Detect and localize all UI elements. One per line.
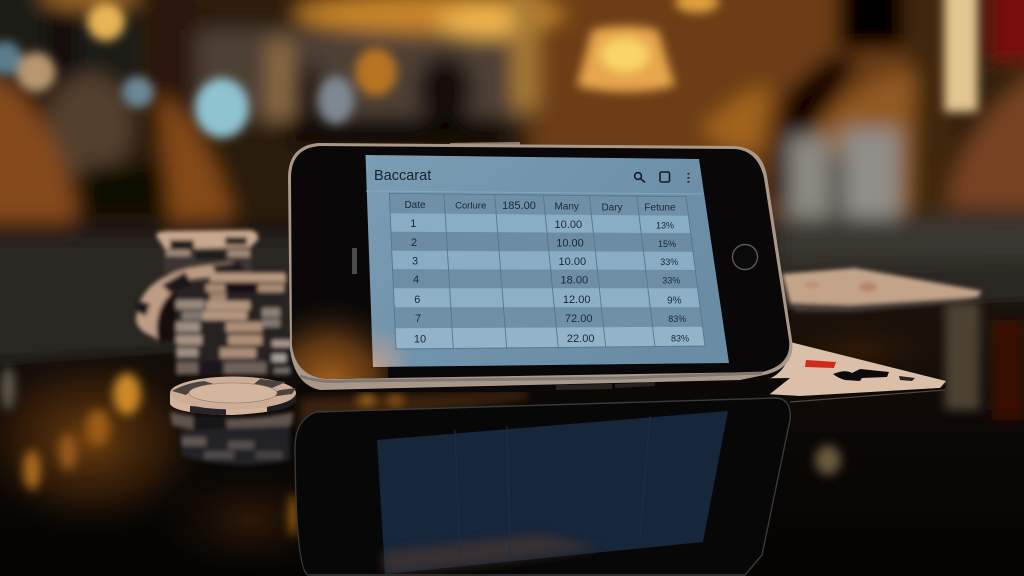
table text: 83% [668, 314, 686, 324]
bottom silver edge [300, 373, 762, 381]
phone [288, 142, 792, 392]
table text: 10.00 [559, 256, 586, 268]
home button [732, 244, 758, 270]
table text: 9% [667, 296, 682, 306]
top chip stack [164, 236, 252, 272]
table text: 1 [410, 218, 416, 230]
table text: Date [404, 200, 426, 211]
table text: 10.00 [555, 219, 582, 231]
table text: Fetune [644, 202, 676, 214]
table text: Dary [601, 202, 623, 214]
far table band [0, 210, 1024, 372]
table text: 10.00 [556, 238, 584, 250]
white cups [788, 136, 832, 218]
table text: 185.00 [502, 200, 536, 212]
table text: 6 [414, 294, 420, 306]
blurred playing card (back) [782, 268, 982, 312]
phone silver frame [288, 143, 792, 390]
phone reflection on the table [295, 378, 790, 575]
chairs [0, 50, 76, 232]
leaning chip [136, 262, 245, 340]
tall chip stack [176, 271, 288, 375]
black glossy table surface [0, 302, 1024, 576]
table text: Corlure [455, 200, 486, 212]
blurred restaurant background [0, 0, 1024, 372]
table text: 18.00 [561, 274, 588, 286]
table text: 7 [415, 313, 421, 325]
table text: 15% [658, 239, 676, 249]
warm glow on bezel [292, 308, 388, 379]
table text: 10 [414, 334, 426, 346]
toolbar icons [635, 172, 688, 182]
table text: 12.00 [563, 294, 590, 306]
table text [404, 200, 689, 346]
seated figures [46, 10, 78, 88]
table text: 33% [660, 257, 678, 267]
chip reflection [170, 412, 294, 465]
phone underside [296, 352, 790, 392]
card red pip [805, 360, 836, 368]
playing card (front) [765, 342, 946, 404]
table text: 22.00 [567, 333, 594, 345]
speaker [352, 248, 357, 274]
table text: 2 [411, 237, 417, 249]
data table [389, 193, 705, 349]
table text: Many [554, 202, 579, 212]
table text: 13% [656, 220, 674, 230]
table text: 3 [412, 256, 418, 268]
table text: 72.00 [565, 313, 592, 325]
small chip stack behind phone [270, 337, 292, 377]
table text: 83% [671, 334, 689, 344]
app title: Baccarat [374, 168, 431, 184]
table text: 4 [413, 274, 419, 286]
card black mark [833, 369, 889, 381]
lights and lamp [0, 0, 978, 138]
front poker chip [170, 376, 296, 415]
phone screen [365, 155, 729, 370]
stack of poker chips [136, 230, 292, 377]
phone black face [291, 146, 789, 379]
reflected screen [377, 411, 728, 574]
table text: 33% [662, 276, 680, 286]
